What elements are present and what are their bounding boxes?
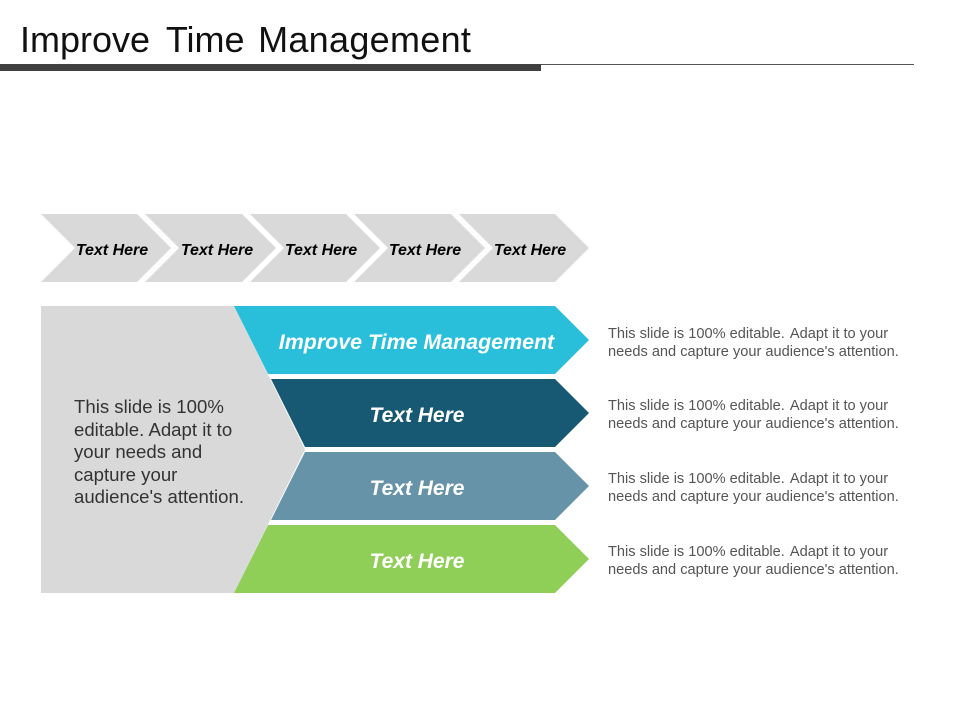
chevron row: Text Here [389, 242, 461, 259]
chevron row: Text Here [285, 242, 357, 259]
arrow band: steel blue [271, 452, 589, 520]
title: Improve Time Management [20, 19, 471, 60]
chevron row: Text Here [181, 242, 253, 259]
left panel text: audience's attention. [74, 486, 244, 507]
description 4 [608, 544, 899, 578]
arrow band: steel blue: Text Here [370, 477, 465, 500]
arrow band: dark blue [271, 379, 589, 447]
left panel text: This slide is 100% [74, 396, 224, 417]
description 3: This slide is 100% editable. Adapt it to your [608, 471, 888, 487]
arrow band: green: Text Here [370, 550, 465, 573]
description 4: needs and capture your audience's attention. [608, 562, 899, 578]
left panel text: capture your [74, 464, 177, 484]
description 3: needs and capture your audience's attention. [608, 489, 899, 505]
arrow band: green [234, 525, 589, 593]
chevron row: Text Here [494, 242, 566, 259]
arrow band: cyan: Improve Time Management [279, 330, 555, 354]
arrow band: dark blue: Text Here [370, 404, 465, 427]
description 2: This slide is 100% editable. Adapt it to your [608, 398, 888, 414]
arrow band: cyan [234, 306, 589, 374]
left gray panel [41, 306, 305, 593]
left panel text: your needs and [74, 441, 202, 462]
description 1: This slide is 100% editable. Adapt it to your [608, 326, 888, 342]
left panel text: editable. Adapt it to [74, 418, 232, 440]
description 3 [608, 471, 899, 505]
description 2: needs and capture your audience's attention. [608, 416, 899, 432]
description 1: needs and capture your audience's attention. [608, 344, 899, 360]
chevron row [41, 214, 589, 282]
description 4: This slide is 100% editable. Adapt it to your [608, 544, 888, 560]
chevron row: Text Here [76, 242, 148, 259]
description 1 [608, 326, 899, 360]
description 2 [608, 398, 899, 432]
left panel text [74, 396, 244, 507]
